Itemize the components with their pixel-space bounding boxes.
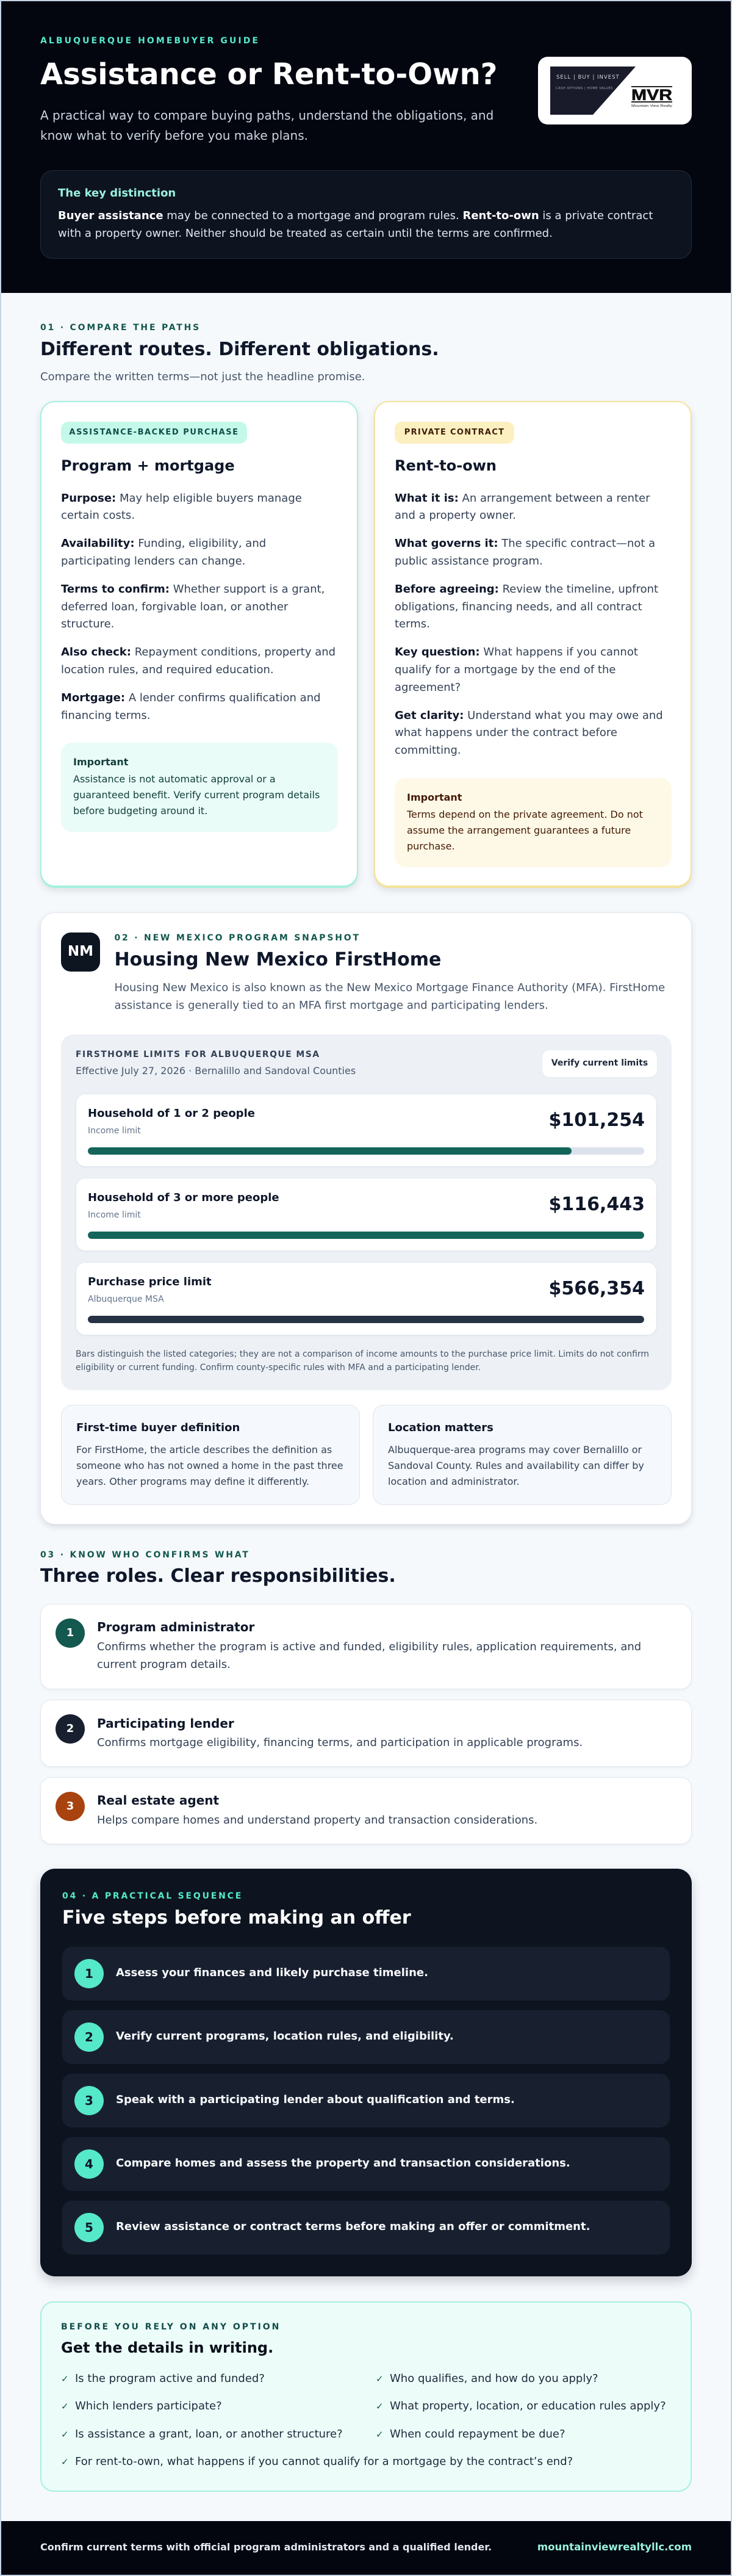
checklist items: Is the program active and funded? xyxy=(75,2372,265,2385)
step number: 5 xyxy=(85,2220,93,2235)
row value: $101,254 xyxy=(548,1109,645,1131)
note text: Assistance is not automatic approval or a xyxy=(73,773,276,785)
number badge: 2 xyxy=(66,1722,74,1735)
section intro: Housing New Mexico is also known as the New Mexico Mortgage Finance Authority (MFA). FirstHome xyxy=(115,981,665,994)
row sublabel: Income limit xyxy=(88,1126,141,1136)
panel text: years. Other programs may define it differently. xyxy=(76,1476,309,1487)
checklist items: ✓ xyxy=(61,2456,69,2467)
hero subtitle: A practical way to compare buying paths, understand the obligations, and xyxy=(40,108,493,123)
number badge: 3 xyxy=(66,1800,74,1813)
section eyebrow: 01 · COMPARE THE PATHS xyxy=(40,323,201,333)
verify button: Verify current limits xyxy=(551,1058,648,1068)
section 01 heading xyxy=(40,323,439,383)
limits label: FIRSTHOME LIMITS FOR ALBUQUERQUE MSA xyxy=(76,1050,320,1059)
section eyebrow: 02 · NEW MEXICO PROGRAM SNAPSHOT xyxy=(115,933,361,943)
note text xyxy=(406,809,643,852)
card details: financing terms. xyxy=(61,709,150,722)
footer link: mountainviewrealtyllc.com xyxy=(537,2541,692,2553)
pill: private contract: PRIVATE CONTRACT xyxy=(404,428,504,437)
limits effective date: Effective July 27, 2026 · Bernalillo and Sandoval Counties xyxy=(76,1065,356,1077)
panel text: Sandoval County. Rules and availability can differ by xyxy=(388,1460,644,1471)
checklist items: ✓ xyxy=(61,2373,69,2384)
section intro: assistance is generally tied to an MFA first mortgage and participating lenders. xyxy=(115,998,548,1012)
logo: MVR xyxy=(631,87,672,104)
bar row: purchase price limit xyxy=(76,1262,657,1335)
row sublabel: Income limit xyxy=(88,1210,141,1220)
section title: Five steps before making an offer xyxy=(62,1907,411,1928)
card details: what happens under the contract before xyxy=(395,726,617,739)
card details: What governs it: The specific contract—not a xyxy=(395,537,655,550)
section intro xyxy=(115,981,665,1012)
role text: Confirms mortgage eligibility, financing terms, and participation in applicable programs. xyxy=(97,1736,583,1749)
row label: Household of 3 or more people xyxy=(88,1191,279,1204)
checklist title: Get the details in writing. xyxy=(61,2339,273,2356)
icon: NM badge xyxy=(61,933,100,972)
row value: $566,354 xyxy=(548,1278,645,1299)
panel text: someone who has not owned a home in the past three xyxy=(76,1460,343,1471)
section 03 heading xyxy=(40,1550,396,1587)
panel: FirstHome limits chart xyxy=(61,1034,672,1390)
checklist items: ✓ xyxy=(376,2429,384,2440)
step number xyxy=(74,2213,104,2242)
checklist items: ✓ xyxy=(61,2401,69,2412)
note text: before budgeting around it. xyxy=(73,805,207,817)
icon: NM badge: NM xyxy=(68,943,93,959)
section title: Three roles. Clear responsibilities. xyxy=(40,1565,396,1587)
checklist items xyxy=(61,2372,666,2468)
number badge xyxy=(56,1618,85,1648)
step text: Assess your finances and likely purchase timeline. xyxy=(116,1966,428,1979)
card details: qualify for a mortgage by the end of the xyxy=(395,663,615,676)
logo: CASH OPTIONS | HOME VALUES xyxy=(556,87,613,90)
checklist items: What property, location, or education rules apply? xyxy=(390,2400,666,2412)
panel: get the details in writing xyxy=(40,2301,692,2492)
checklist items: When could repayment be due? xyxy=(390,2428,565,2441)
step number xyxy=(74,2086,104,2115)
step number xyxy=(74,2149,104,2179)
panel text xyxy=(388,1444,644,1487)
chart footnote xyxy=(76,1349,649,1373)
section title: Housing New Mexico FirstHome xyxy=(115,949,441,970)
footer xyxy=(1,2521,731,2575)
step number xyxy=(74,1959,104,1988)
bar row: household of 3 or more xyxy=(76,1178,657,1251)
checklist items: Who qualifies, and how do you apply? xyxy=(390,2372,598,2385)
step text: Speak with a participating lender about qualification and terms. xyxy=(116,2093,515,2106)
card details: participating lenders can change. xyxy=(61,555,245,568)
panel: New Mexico program snapshot xyxy=(40,912,692,1524)
step 5 xyxy=(62,2201,670,2254)
step number xyxy=(74,2022,104,2052)
panel: first-time buyer definition xyxy=(61,1405,360,1505)
panel: program + mortgage xyxy=(40,401,358,887)
panel: location matters xyxy=(373,1405,672,1505)
card details: Get clarity: Understand what you may owe and xyxy=(395,709,663,722)
step text: Compare homes and assess the property and transaction considerations. xyxy=(116,2157,570,2170)
card details: Terms to confirm: Whether support is a grant, xyxy=(61,583,325,596)
section title: Different routes. Different obligations. xyxy=(40,339,439,360)
step 1 xyxy=(62,1947,670,2001)
panel text xyxy=(76,1444,343,1487)
step text: Verify current programs, location rules, and eligibility. xyxy=(116,2030,454,2043)
card details: certain costs. xyxy=(61,509,135,522)
pill: private contract xyxy=(395,422,514,444)
card details: Purpose: May help eligible buyers manage xyxy=(61,492,302,505)
bar row: household of 1 or 2 xyxy=(76,1094,657,1167)
hero subtitle xyxy=(40,108,493,143)
callout text xyxy=(58,209,653,240)
card details: location rules, and required education. xyxy=(61,663,274,676)
card details xyxy=(61,492,336,722)
step 3 xyxy=(62,2074,670,2127)
checklist items: ✓ xyxy=(61,2429,69,2440)
step number: 3 xyxy=(85,2093,93,2108)
panel heading: Location matters xyxy=(388,1421,493,1434)
card details: Availability: Funding, eligibility, and xyxy=(61,537,266,550)
role title: Participating lender xyxy=(97,1716,234,1731)
verify button xyxy=(542,1050,657,1077)
role: program administrator xyxy=(40,1604,692,1689)
role text: Confirms whether the program is active and funded, eligibility rules, application requirements, and xyxy=(97,1640,641,1653)
important note xyxy=(61,743,338,832)
card details: public assistance program. xyxy=(395,555,543,568)
note text xyxy=(73,773,320,817)
row sublabel: Albuquerque MSA xyxy=(88,1294,164,1304)
role text: current program details. xyxy=(97,1658,231,1671)
section subtitle: Compare the written terms—not just the headline promise. xyxy=(40,370,365,383)
card details: Also check: Repayment conditions, property and xyxy=(61,646,336,658)
logo: SELL | BUY | INVEST xyxy=(556,74,620,81)
checklist items: ✓ xyxy=(376,2373,384,2384)
card details: terms. xyxy=(395,618,430,630)
number badge xyxy=(56,1792,85,1821)
step text: Review assistance or contract terms before making an offer or commitment. xyxy=(116,2220,590,2233)
panel: rent-to-own xyxy=(374,401,692,887)
chart footnote: Bars distinguish the listed categories; they are not a comparison of income amounts to the purchase price limit. Limits do not confirm xyxy=(76,1349,649,1359)
row value: $116,443 xyxy=(548,1194,645,1215)
panel heading: First-time buyer definition xyxy=(76,1421,240,1434)
role title: Program administrator xyxy=(97,1620,254,1634)
card title: Program + mortgage xyxy=(61,457,235,474)
card details: structure. xyxy=(61,618,114,630)
pill: assistance-backed purchase xyxy=(61,422,247,444)
row label: Purchase price limit xyxy=(88,1275,212,1288)
row label: Household of 1 or 2 people xyxy=(88,1107,255,1120)
role: real estate agent xyxy=(40,1777,692,1844)
note text: Terms depend on the private agreement. Do not xyxy=(407,809,643,820)
chart footnote: eligibility or current funding. Confirm county-specific rules with MFA and a participating lender. xyxy=(76,1363,481,1373)
panel text: Albuquerque-area programs may cover Bernalillo or xyxy=(388,1444,642,1456)
note text: guaranteed benefit. Verify current program details xyxy=(73,789,320,801)
card title: Rent-to-own xyxy=(395,457,497,474)
step number: 2 xyxy=(85,2030,93,2044)
role text xyxy=(97,1640,641,1671)
checklist items: Is assistance a grant, loan, or another structure? xyxy=(75,2428,343,2441)
note heading: Important xyxy=(407,792,462,803)
pill: assistance-backed purchase: ASSISTANCE-BACKED PURCHASE xyxy=(69,428,239,437)
bar xyxy=(88,1316,644,1323)
note text: assume the arrangement guarantees a future xyxy=(407,824,631,836)
title: Assistance or Rent-to-Own? xyxy=(40,57,497,92)
hero eyebrow: ALBUQUERQUE HOMEBUYER GUIDE xyxy=(40,36,260,46)
role text: Helps compare homes and understand property and transaction considerations. xyxy=(97,1814,537,1826)
hero subtitle: know what to verify before you make plans. xyxy=(40,128,308,143)
card details: committing. xyxy=(395,744,461,757)
step number: 1 xyxy=(85,1966,93,1981)
important note xyxy=(395,778,672,867)
card details: Key question: What happens if you cannot xyxy=(395,646,638,658)
callout heading: The key distinction xyxy=(58,187,176,200)
panel text: For FirstHome, the article describes the definition as xyxy=(76,1444,332,1456)
card details: Mortgage: A lender confirms qualification and xyxy=(61,691,321,704)
callout text: with a property owner. Neither should be treated as certain until the terms are confirmed. xyxy=(58,227,553,240)
logo xyxy=(538,57,692,124)
checklist items: Which lenders participate? xyxy=(75,2400,222,2412)
logo: Mountain View Realty xyxy=(631,104,672,108)
card details: Before agreeing: Review the timeline, upfront xyxy=(395,583,658,596)
card details: and a property owner. xyxy=(395,509,516,522)
card details: obligations, financing needs, and all contract xyxy=(395,601,642,613)
note text: purchase. xyxy=(407,840,455,852)
card details: What it is: An arrangement between a renter xyxy=(395,492,650,505)
checklist items: ✓ xyxy=(376,2401,384,2412)
number badge: 1 xyxy=(66,1626,74,1639)
bar xyxy=(88,1147,644,1155)
panel: five steps xyxy=(40,1869,692,2276)
key distinction callout xyxy=(40,170,692,259)
checklist items: For rent-to-own, what happens if you cannot qualify for a mortgage by the contract’s end? xyxy=(75,2455,573,2468)
card details xyxy=(395,492,663,757)
bar xyxy=(88,1232,644,1239)
role title: Real estate agent xyxy=(97,1793,219,1808)
step number: 4 xyxy=(85,2157,93,2171)
section eyebrow: 04 · A PRACTICAL SEQUENCE xyxy=(62,1891,243,1901)
footer note: Confirm current terms with official program administrators and a qualified lender. xyxy=(40,2541,492,2553)
number badge xyxy=(56,1714,85,1744)
checklist eyebrow: BEFORE YOU RELY ON ANY OPTION xyxy=(61,2322,281,2332)
card details: agreement? xyxy=(395,681,461,694)
note heading: Important xyxy=(73,756,128,768)
role: participating lender xyxy=(40,1700,692,1767)
hero header xyxy=(1,1,731,293)
panel text: location and administrator. xyxy=(388,1476,520,1487)
step 4 xyxy=(62,2137,670,2191)
callout text: Buyer assistance may be connected to a mortgage and program rules. Rent-to-own is a private contract xyxy=(58,209,653,222)
step 2 xyxy=(62,2010,670,2064)
section eyebrow: 03 · KNOW WHO CONFIRMS WHAT xyxy=(40,1550,250,1560)
card details: deferred loan, forgivable loan, or another xyxy=(61,601,288,613)
